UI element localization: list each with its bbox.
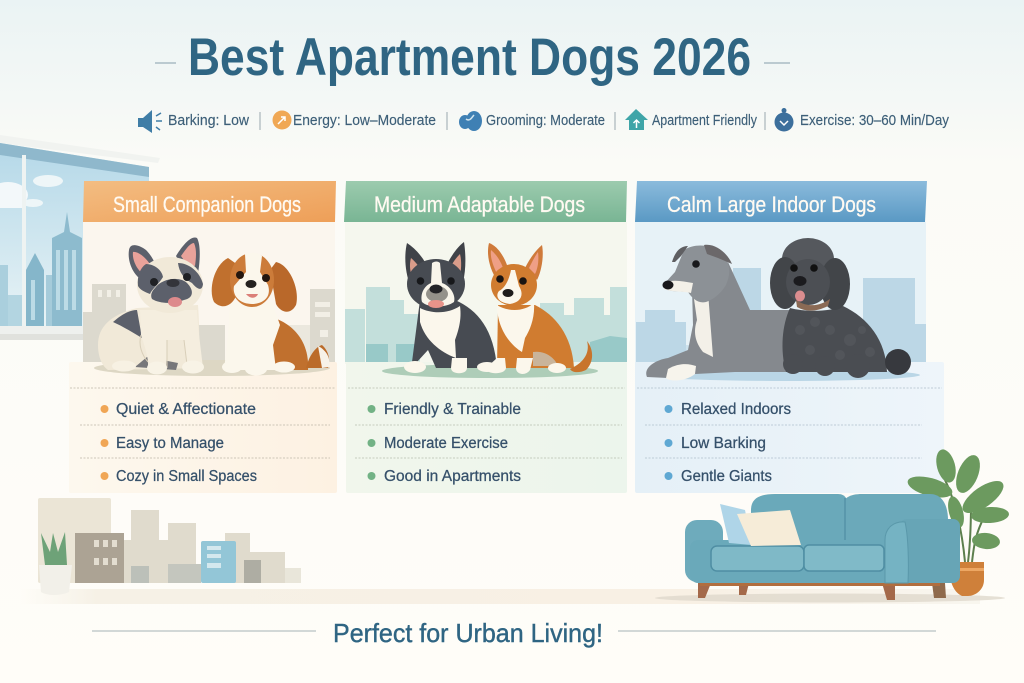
- floor: [20, 589, 980, 604]
- icon: apartment house: [625, 109, 648, 130]
- seat cushions: [711, 546, 804, 571]
- list divider lines: [70, 388, 335, 458]
- icon: grooming: [459, 111, 482, 131]
- grooming label: Grooming: Moderate: [486, 112, 605, 129]
- apartment window: [0, 135, 160, 340]
- header: Small Companion Dogs: [113, 192, 301, 217]
- dog: boston terrier: [404, 242, 497, 373]
- list: traits: Low Barking: [681, 435, 766, 452]
- header: [83, 181, 336, 222]
- ground shadow: [94, 360, 330, 376]
- list: traits: Friendly & Trainable: [384, 401, 521, 418]
- panel: calm large indoor dogs: [635, 181, 944, 493]
- city model and plant: [38, 498, 301, 595]
- list: traits: Cozy in Small Spaces: [116, 468, 257, 485]
- header: [635, 181, 927, 222]
- header: Medium Adaptable Dogs: [374, 192, 585, 217]
- apartment label: Apartment Friendly: [652, 112, 757, 129]
- panel lower: [69, 362, 337, 493]
- list: traits: Gentle Giants: [681, 468, 772, 485]
- exercise label: Exercise: 30–60 Min/Day: [800, 112, 949, 129]
- barking label: Barking: Low: [168, 112, 249, 129]
- list: traits: Easy to Manage: [116, 435, 224, 452]
- list: traits: Good in Apartments: [384, 468, 521, 485]
- dog: tan terrier: [486, 243, 592, 374]
- list: traits: Relaxed Indoors: [681, 401, 791, 418]
- header: [344, 181, 627, 222]
- panel: small companion dogs: [69, 181, 337, 493]
- shadow: [655, 594, 1005, 602]
- skyline: [83, 284, 335, 364]
- dog: french bulldog: [98, 237, 204, 374]
- list divider lines: [348, 388, 625, 458]
- panel body: [83, 222, 335, 364]
- header: Calm Large Indoor Dogs: [667, 192, 876, 217]
- list: traits: [368, 401, 521, 485]
- attribute bar: [138, 108, 949, 133]
- energy label: Energy: Low–Moderate: [293, 112, 436, 129]
- panel lower: [635, 362, 944, 493]
- skyline: [636, 268, 926, 362]
- panel lower: [346, 362, 627, 493]
- pot: [950, 562, 984, 596]
- list: traits: [664, 401, 791, 485]
- skyline: [345, 287, 627, 362]
- footer tagline: Perfect for Urban Living!: [333, 618, 603, 648]
- pillows: [720, 504, 752, 545]
- icon: barking speaker: [138, 110, 162, 133]
- dog: poodle: [770, 238, 911, 378]
- ground shadow: [650, 369, 920, 381]
- sofa legs: [698, 583, 946, 600]
- panel: medium adaptable dogs: [344, 181, 627, 493]
- icon: exercise stopwatch: [774, 108, 794, 132]
- list: traits: Moderate Exercise: [384, 435, 508, 452]
- list divider lines: [637, 388, 942, 458]
- dog: cavalier spaniel: [212, 253, 329, 376]
- panel body: [635, 222, 926, 364]
- list: traits: Quiet & Affectionate: [116, 401, 256, 418]
- plant pot: [39, 532, 72, 595]
- sofa and plant: [655, 447, 1009, 602]
- sofa back: [751, 494, 848, 548]
- ground shadow: [382, 364, 598, 378]
- dog: greyhound: [646, 245, 800, 381]
- title: Best Apartment Dogs 2026: [188, 28, 751, 87]
- panel body: [345, 222, 627, 364]
- sofa body: [685, 520, 723, 582]
- list: traits: [100, 401, 257, 485]
- plant: [905, 447, 1009, 562]
- icon: energy: [272, 110, 292, 130]
